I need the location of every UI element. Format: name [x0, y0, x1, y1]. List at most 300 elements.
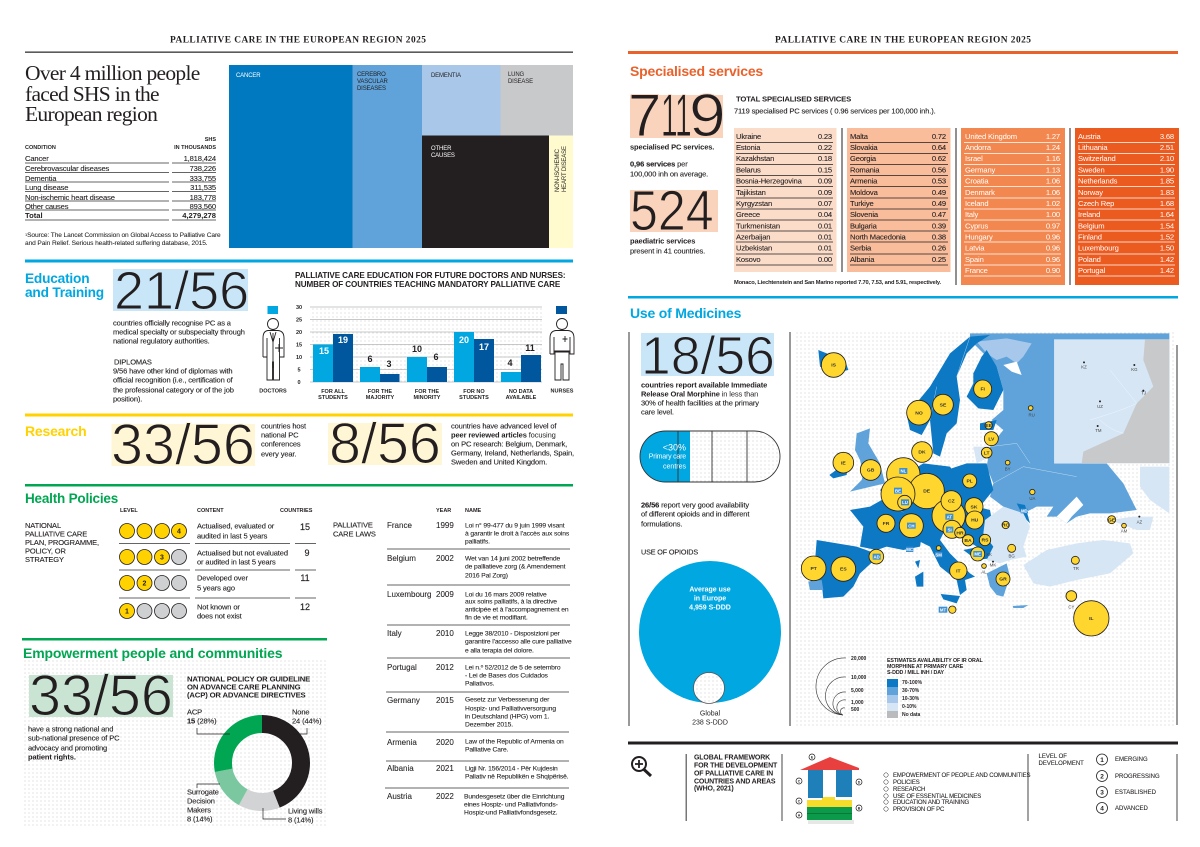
table column: upper-middle rates: Croatia [965, 176, 989, 186]
paediatric text: present in 41 countries. [630, 246, 705, 256]
health policy level table: 12 [300, 602, 310, 612]
icon: building-block house: C [798, 779, 801, 783]
pill graphic: under 30 percent: centres [663, 464, 686, 470]
table column: upper-middle rates: Germany [965, 166, 996, 174]
table column: lowest rates: 0.09 [818, 176, 832, 186]
treemap: SHS by condition: OTHER [431, 146, 452, 152]
treemap: SHS by condition: VASCULAR [357, 79, 389, 85]
palliative care laws table: Germany [387, 696, 420, 705]
education text block: countries officially recognise PC as a [113, 318, 232, 328]
framework heading: COUNTRIES AND AREAS [694, 778, 776, 786]
palliative care laws table: Dezember 2015. [465, 722, 513, 728]
table column: lowest rates: 0.09 [818, 188, 832, 197]
proportional circles: opioid use: 4,959 S-DDD [689, 604, 731, 612]
bar chart: mandatory palliative care: 17 [479, 342, 489, 352]
palliative care laws table: 2015 [436, 696, 454, 705]
table column: lower-middle rates: 0.49 [932, 199, 946, 208]
proportional circles: opioid use: Global [700, 710, 721, 718]
donut chart: ACP: Living wills [288, 806, 323, 816]
map: availability of oral morphine and bubbles: DE [923, 489, 931, 495]
table column: highest rates: 3.68 [1160, 132, 1174, 141]
treemap: SHS by condition: LUNG [508, 72, 525, 78]
level of development key: 2 [1100, 774, 1104, 780]
treemap: SHS by condition [229, 65, 573, 248]
table column: highest rates: Switzerland [1078, 154, 1116, 163]
proportional circles: opioid use [639, 561, 781, 726]
bar chart: mandatory palliative care: 6 [367, 354, 373, 364]
bar chart: mandatory palliative care: FOR ALL [321, 389, 345, 395]
palliative care laws table: 2016 Pal Zorg) [465, 572, 508, 580]
bar chart: mandatory palliative care: STUDENTS [459, 395, 489, 401]
map: availability of oral morphine and bubbles: PT [810, 566, 817, 572]
national strategy label: POLICY, OR [25, 546, 66, 556]
research text: articles: Germany, Ireland, Netherlands, Spain, [451, 448, 574, 458]
palliative care laws table: YEAR [436, 508, 451, 514]
palliative care laws table: 2021 [436, 764, 454, 773]
table column: lower-middle rates: Turkiye [850, 199, 874, 208]
empowerment text block: patient rights. [28, 752, 76, 762]
map: availability of oral morphine and bubbles: BY [1005, 467, 1011, 472]
table column: lowest rates: Kazakhstan [736, 154, 774, 163]
bar chart: mandatory palliative care: MINORITY [414, 395, 441, 401]
bar chart: mandatory palliative care: 5 [297, 368, 301, 374]
table column: lower-middle rates: Albania [850, 255, 875, 264]
framework key list [884, 773, 1031, 813]
SHS conditions table: Dementia [25, 174, 57, 183]
SHS conditions table: Lung disease [25, 183, 68, 192]
national strategy label: PLAN, PROGRAMME, [25, 538, 99, 547]
table column: upper-middle rates: 0.90 [1046, 266, 1060, 275]
bar chart: mandatory palliative care: FOR THE [368, 389, 392, 395]
opioid availability text: formulations. [641, 520, 682, 528]
map: availability of oral morphine and bubbles: AD [874, 554, 880, 559]
level of development key: ESTABLISHED [1115, 790, 1157, 796]
heading: research: Research [25, 423, 86, 439]
table column: lower-middle rates: 0.39 [932, 222, 946, 230]
research text: articles: on PC research: Belgium, Denmark, [451, 440, 567, 448]
bar chart: mandatory palliative care: FOR NO [463, 389, 485, 395]
map: availability of oral morphine and bubbles: SI [948, 527, 952, 532]
map: availability of oral morphine and bubbles: TJ [1141, 390, 1146, 395]
palliative care laws table: garantire l'accesso alle cure palliative [465, 638, 572, 646]
education text block: the professional category or of the job [113, 386, 234, 394]
level of development key: 1 [1100, 757, 1104, 764]
map: availability of oral morphine and bubbles: IS [831, 363, 837, 369]
morphine text block: countries report available Immediate [641, 380, 767, 390]
table column: lower-middle rates: Romania [850, 166, 880, 174]
icon: doctor [259, 306, 287, 394]
palliative care laws table: 2009 [436, 590, 454, 599]
left page header: PALLIATIVE CARE IN THE EUROPEAN REGION 2025 [170, 36, 426, 46]
chart heading: PALLIATIVE CARE EDUCATION FOR FUTURE DOCTORS AND NURSES: [295, 271, 566, 280]
map: availability of oral morphine and bubbles: TM [1095, 428, 1102, 433]
table column: lowest rates: 0.01 [818, 222, 832, 230]
palliative care laws table: in Deutschland (HPG) vom 1. [465, 714, 550, 720]
table column: lowest rates: Turkmenistan [736, 222, 780, 230]
table column: upper-middle rates: 1.13 [1046, 166, 1060, 174]
palliative care laws table: Loi du 16 mars 2009 relative [465, 592, 547, 598]
table column: lower-middle rates: 0.25 [932, 255, 946, 264]
map: availability of oral morphine and bubbles: MK [990, 563, 996, 568]
SHS conditions table: 4,279,278 [182, 211, 216, 220]
table column: lowest rates: Kyrgyzstan [736, 199, 772, 208]
level of development key: PROGRESSING [1115, 774, 1160, 780]
table column: highest rates: 1.50 [1160, 244, 1174, 252]
table column: highest rates: 1.42 [1160, 266, 1174, 275]
specialised services text: 0,96 services per [630, 160, 688, 168]
table column: highest rates: Lithuania [1078, 143, 1108, 152]
table column: lower-middle rates: North Macedonia [850, 232, 907, 242]
table column: highest rates: 2.51 [1160, 143, 1174, 152]
table column: highest rates: Ireland [1078, 210, 1100, 219]
palliative care laws table: Ligji Nr. 156/2014 - Për Kujdesin [465, 766, 558, 772]
table column: lowest rates: Tajikistan [736, 188, 766, 197]
palliative care laws table: Gesetz zur Verbesserung der [465, 696, 550, 704]
table column: highest rates: 2.10 [1160, 154, 1174, 163]
national strategy label: STRATEGY [25, 555, 64, 564]
section rule: education [25, 260, 573, 262]
health policy level table: audited in last 5 years [197, 532, 268, 540]
title: over 4 million people: Over 4 million people [25, 61, 200, 85]
heading: use of medicines: Use of Medicines [630, 305, 742, 321]
table column: upper-middle rates: Israel [965, 154, 983, 163]
icon: doctor: DOCTORS [259, 388, 287, 394]
map: availability of oral morphine and bubbles: IT [956, 568, 961, 574]
table column: highest rates: 1.42 [1160, 255, 1174, 264]
bar chart: mandatory palliative care: 20 [296, 330, 302, 336]
health policy level table: 4 [177, 528, 181, 536]
map: availability of oral morphine and bubbles: BA [964, 538, 972, 544]
paediatric text: paediatric services [630, 236, 695, 246]
map: availability of oral morphine and bubbles: SE [940, 402, 947, 408]
chart heading: NUMBER OF COUNTRIES TEACHING MANDATORY PALLIATIVE CARE [295, 280, 561, 289]
research text: articles: countries have advanced level of [451, 422, 557, 430]
map: availability of oral morphine and bubbles: GB [867, 468, 875, 474]
level of development key [1038, 754, 1160, 814]
national strategy label: PALLIATIVE CARE [25, 530, 87, 538]
bar chart: mandatory palliative care: FOR THE [415, 389, 439, 395]
table column: upper-middle rates: 1.02 [1046, 199, 1060, 208]
table column: upper-middle rates: 0.97 [1046, 222, 1060, 230]
map: availability of oral morphine and bubbles: LT [984, 450, 990, 456]
bar chart: mandatory palliative care [296, 305, 542, 401]
palliative care laws table: Belgium [387, 554, 416, 563]
empowerment text block [28, 724, 120, 762]
table column: highest rates: Austria [1078, 132, 1102, 141]
SHS conditions table: 333,755 [190, 174, 216, 183]
map: availability of oral morphine and bubbles: ME [974, 552, 981, 557]
health policy level table: Not known or [197, 602, 240, 612]
map: availability of oral morphine and bubbles: AT [947, 514, 952, 519]
map: availability of oral morphine and bubbles: GE [1108, 517, 1116, 523]
stat: 8/56 articles: 8/56 [329, 412, 441, 476]
level of development key: DEVELOPMENT [1038, 761, 1084, 767]
table column: lower-middle rates: 0.38 [932, 232, 946, 242]
map: availability of oral morphine and bubbles: RS [982, 538, 989, 544]
map: availability of oral morphine and bubbles: UZ [1097, 404, 1103, 409]
table column: highest rates: Belgium [1078, 222, 1104, 230]
table column: highest rates: Norway [1078, 188, 1103, 197]
map legend: availability colours: 10-30% [902, 696, 920, 702]
bar chart: mandatory palliative care: 25 [296, 318, 302, 324]
map: availability of oral morphine and bubbles: CH [908, 523, 914, 528]
specialised services text [630, 142, 714, 178]
table column: lower-middle rates: 0.62 [932, 154, 946, 163]
palliative care laws table: PALLIATIVE [333, 520, 373, 530]
health policy level table: does not exist [197, 612, 243, 620]
empowerment text block: advocacy and promoting [28, 744, 107, 752]
level of development key: EMERGING [1115, 757, 1148, 763]
national strategy label [25, 521, 99, 564]
table column: lowest rates: Estonia [736, 143, 761, 152]
palliative care laws table: - Lei de Bases dos Cuidados [465, 672, 549, 680]
pill graphic: under 30 percent [640, 431, 780, 482]
table column: lowest rates: 0.04 [818, 210, 832, 219]
bar chart: mandatory palliative care: 19 [338, 335, 348, 345]
framework key list: EMPOWERMENT OF PEOPLE AND COMMUNITIES [893, 773, 1031, 779]
education text block: position). [113, 394, 142, 404]
table column: highest rates: 1.52 [1160, 232, 1174, 242]
table column: lower-middle rates: Bulgaria [850, 222, 878, 230]
SHS conditions table: Total [25, 211, 43, 220]
total specialised services heading: TOTAL SPECIALISED SERVICES [736, 94, 851, 104]
bar chart: mandatory palliative care: 10 [296, 355, 302, 361]
framework key list: PROVISION OF PC [893, 807, 945, 813]
pill graphic: under 30 percent: <30% [663, 442, 686, 452]
empowerment text block: sub-national presence of PC [28, 734, 120, 742]
table column: upper-middle rates: Hungary [965, 232, 993, 242]
map legend: bubble scale: 20,000 [851, 656, 867, 662]
table column: upper-middle rates: 1.27 [1046, 132, 1060, 141]
health policy level table: LEVEL [120, 508, 138, 514]
reported rates footnote: Monaco, Liechtenstein and San Marino reported 7.70, 7.53, and 5.91, respectively. [734, 280, 942, 286]
palliative care laws table: France [387, 521, 412, 530]
ACP heading: NATIONAL POLICY OR GUIDELINE [187, 674, 310, 684]
map: availability of oral morphine and bubbles: RO [1002, 523, 1010, 529]
map: availability of oral morphine and bubbles: AZ [1137, 519, 1142, 524]
icon: building-block house: A [798, 813, 801, 817]
icon: building-block house [796, 754, 862, 824]
empowerment text block: have a strong national and [28, 724, 113, 734]
stat: 7119: 1 [675, 83, 692, 150]
heading: education and training: and Training [25, 285, 104, 300]
education text block [113, 318, 245, 404]
stat: 7119: 9 [689, 83, 726, 149]
table column: highest rates: 1.83 [1160, 188, 1174, 197]
morphine text block: Release Oral Morphine in less than [641, 390, 758, 398]
table column: highest rates: 1.90 [1160, 166, 1174, 174]
table column: lower-middle rates: 0.56 [932, 166, 946, 174]
SHS conditions table: 311,535 [190, 183, 216, 192]
treemap: SHS by condition: DISEASES [357, 86, 386, 92]
paediatric text [630, 236, 705, 256]
research text: articles [451, 422, 574, 466]
research text: conferences: countries host [261, 422, 307, 430]
table column: highest rates [1075, 128, 1179, 285]
level of development key: 3 [1100, 790, 1104, 796]
palliative care laws table: 2020 [436, 738, 454, 747]
icon: magnifier [632, 757, 651, 776]
section rule: bottom framework [628, 742, 1178, 744]
title: over 4 million people: European region [25, 102, 158, 126]
bar chart: mandatory palliative care: 6 [433, 352, 439, 362]
donut chart: ACP: Surrogate [187, 788, 219, 796]
health policy level table: CONTENT [197, 508, 224, 514]
table column: upper-middle rates: 1.00 [1046, 210, 1060, 219]
education text block: national regulatory authorities. [113, 336, 210, 346]
table column: lower-middle rates: 0.64 [932, 143, 946, 152]
table column: upper-middle rates: 1.06 [1046, 188, 1060, 197]
table column: lowest rates: 0.18 [818, 154, 832, 163]
table column: lowest rates: 0.01 [818, 244, 832, 252]
research text: articles: peer reviewed articles focusing [451, 430, 556, 440]
health policy level table: Actualised but not evaluated [197, 548, 288, 558]
palliative care laws table: Hospiz-und Palliativfondsgesetz. [464, 810, 558, 816]
SHS conditions table [25, 137, 216, 220]
ACP heading: ON ADVANCE CARE PLANNING [187, 682, 301, 692]
donut chart: ACP: 24 (44%) [292, 716, 322, 726]
table column: lowest rates: 0.01 [818, 232, 832, 242]
health policy level table: 5 years ago [197, 584, 235, 592]
palliative care laws table: Lei n.º 52/2012 de 5 de setembro [465, 664, 561, 672]
bar chart: mandatory palliative care: 0 [297, 380, 301, 386]
health policy level table: 3 [160, 554, 164, 562]
palliative care laws table: Palliative Care. [465, 746, 509, 754]
palliative care laws table: de palliatieve zorg (& Amendement [465, 564, 566, 570]
table column: lower-middle rates: Georgia [850, 154, 877, 163]
donut chart: ACP: 8 (14%) [187, 814, 213, 824]
table column: upper-middle rates: Denmark [965, 188, 995, 197]
bar chart: mandatory palliative care: 3 [386, 359, 392, 369]
stat: 33/56 advocacy: 33/56 [29, 664, 173, 728]
framework key list: RESEARCH [893, 787, 925, 793]
map: availability of oral morphine and bubbles: KZ [1081, 364, 1087, 369]
framework heading: OF PALLIATIVE CARE IN [694, 770, 773, 778]
SHS conditions table: IN THOUSANDS [174, 145, 216, 151]
right page header [628, 36, 1178, 54]
map: availability of oral morphine and bubbles: IE [841, 460, 846, 466]
health policy level table: Actualised, evaluated or [197, 522, 275, 530]
total specialised services heading: 7119 specialised PC services ( 0.96 services per 100,000 inh.). [734, 106, 936, 116]
map: availability of oral morphine and bubbles: BG [1009, 553, 1015, 558]
map: availability of oral morphine and bubbles: TR [1073, 566, 1079, 571]
table column: highest rates: Luxembourg [1078, 244, 1119, 252]
icon: building-block house: B [858, 806, 861, 810]
bar chart: mandatory palliative care: 10 [412, 344, 422, 354]
opioid availability text [641, 500, 750, 528]
table column: lowest rates: Bosnia-Herzegovina [736, 176, 803, 186]
palliative care laws table: NAME [465, 508, 482, 514]
research text: conferences: national PC [261, 430, 299, 440]
palliative care laws table [333, 508, 572, 816]
bar chart: mandatory palliative care: 11 [525, 343, 535, 353]
map: availability of oral morphine and bubbles: FI [980, 387, 985, 393]
donut chart: ACP: None [292, 708, 309, 716]
research text: conferences [261, 422, 307, 458]
opioid availability text: of different opioids and in different [641, 510, 750, 518]
framework heading [686, 754, 778, 821]
map: availability of oral morphine and bubbles: EE [985, 423, 993, 429]
table column: upper-middle rates: 0.96 [1046, 244, 1060, 252]
palliative care laws table: CARE LAWS [333, 530, 376, 538]
map legend: availability colours: 70-100% [902, 680, 923, 686]
table column: lower-middle rates: Serbia [850, 244, 872, 252]
SHS conditions table: Cancer [25, 154, 49, 163]
table column: highest rates: 1.64 [1160, 210, 1174, 219]
treemap: SHS by condition: HEART DISEASE [562, 146, 568, 192]
map legend: bubble scale: 1,000 [851, 700, 864, 706]
table column: lowest rates: 0.15 [818, 166, 832, 174]
donut chart: ACP: 15 (28%) [187, 716, 217, 726]
map legend: availability colours: No data [902, 712, 921, 718]
morphine text block [641, 380, 767, 416]
proportional circles: opioid use: 238 S-DDD [692, 720, 728, 726]
table column: upper-middle rates: 1.16 [1046, 154, 1060, 163]
table column: lowest rates: 0.07 [818, 199, 832, 208]
palliative care laws table: Bundesgesetz über die Einrichtung [464, 794, 565, 800]
SHS conditions table: Non-ischemic heart disease [25, 193, 115, 202]
stat: 18/56: 18/56 [641, 327, 775, 386]
map: availability of oral morphine and bubbles: MC [906, 547, 913, 552]
heading: use of opioids: USE OF OPIOIDS [641, 548, 698, 556]
palliative care laws table: 2002 [436, 554, 454, 563]
table column: highest rates: Finland [1078, 232, 1102, 242]
map: availability of oral morphine and bubbles: FR [883, 521, 890, 527]
palliative care laws table: Armenia [387, 738, 417, 747]
framework heading: GLOBAL FRAMEWORK [694, 754, 770, 762]
map legend: bubble scale: 10,000 [851, 675, 867, 681]
table column: lower-middle rates: Moldova [850, 188, 879, 197]
table column: lowest rates: 0.23 [818, 132, 832, 141]
donut chart: ACP [187, 708, 323, 824]
treemap: SHS by condition: CAUSES [431, 153, 455, 159]
table column: upper-middle rates: 1.24 [1046, 143, 1060, 152]
map: availability of oral morphine and bubbles: PL [966, 479, 973, 485]
table column: upper-middle rates: Iceland [965, 199, 988, 208]
map: availability of oral morphine and bubbles [795, 332, 1175, 727]
specialised services text: 100,000 inh on average. [630, 170, 708, 178]
divider [782, 754, 1177, 821]
health policy level table: 1 [125, 608, 129, 616]
treemap: SHS by condition: DEMENTIA [431, 73, 461, 79]
map legend: bubble scale [816, 656, 867, 715]
palliative care laws table: Paliativos. [465, 680, 495, 688]
bar chart: mandatory palliative care: 15 [296, 342, 302, 348]
proportional circles: opioid use: Average use [689, 586, 731, 594]
table column: lower-middle rates: Slovakia [850, 143, 878, 152]
table column: upper-middle rates: France [965, 266, 988, 275]
map legend: bubble scale: 5,000 [851, 688, 864, 694]
donut chart: ACP: Decision [187, 796, 215, 806]
health policy level table [119, 508, 316, 620]
SHS conditions table: Other causes [25, 202, 69, 211]
palliative care laws table: anticipée et à l'accompagnement en [465, 606, 569, 614]
table column: lower-middle rates: 0.53 [932, 176, 946, 186]
bar chart: mandatory palliative care: AVAILABLE [506, 395, 537, 401]
donut chart: ACP: Makers [187, 806, 211, 814]
heading: education and training [25, 271, 104, 300]
section rule: health policies [25, 484, 573, 486]
map legend: availability colours: 0-10% [902, 704, 917, 710]
table column: lower-middle rates: Malta [850, 132, 869, 141]
health policy level table: 9 [304, 548, 310, 558]
level of development key: ADVANCED [1115, 806, 1149, 812]
map legend: availability colours: ESTIMATES AVAILABILITY OF IR ORAL [887, 658, 983, 664]
column separators [842, 128, 1070, 285]
palliative care laws table: Portugal [387, 663, 417, 672]
treemap: SHS by condition: DISEASE [508, 79, 533, 85]
palliative care laws table: 2012 [436, 663, 454, 672]
